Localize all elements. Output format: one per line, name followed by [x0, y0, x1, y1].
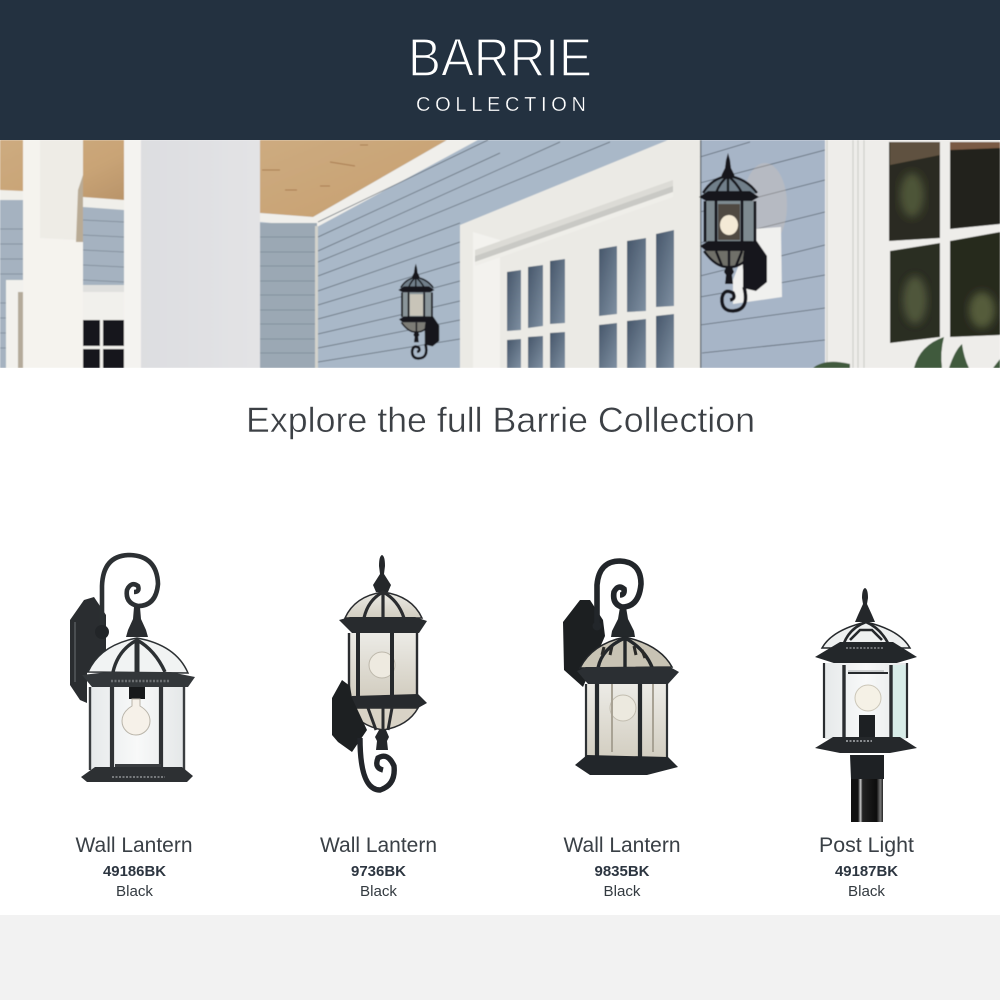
bottom grey band [0, 915, 1000, 1000]
small wall lantern in photo [398, 264, 439, 358]
label 2: 9736BK [351, 864, 406, 880]
label 2 [320, 834, 437, 900]
hero photo: porch with lanterns [0, 140, 1000, 368]
label 4: 49187BK [835, 864, 898, 880]
product 1: wall lantern 49186BK [70, 555, 195, 900]
label 3 [564, 834, 680, 900]
label 1: 49186BK [103, 864, 166, 880]
label 1 [76, 834, 192, 900]
lantern 4 illustration [815, 588, 917, 822]
large wall lantern in photo [699, 153, 767, 311]
white column [124, 140, 260, 368]
label 2: Wall Lantern [320, 834, 437, 857]
back wall [260, 223, 318, 368]
lantern 2 illustration [332, 555, 427, 790]
door window panes [507, 230, 674, 368]
right window frame [825, 140, 1000, 368]
wood ceiling [260, 140, 447, 217]
right wall siding [700, 140, 825, 368]
label 3: 9835BK [594, 864, 650, 880]
ferns [813, 337, 1000, 368]
subtitle: COLLECTION [416, 94, 586, 116]
label 3: Black [604, 883, 641, 900]
label 3: Wall Lantern [564, 834, 680, 857]
left far wall and ceiling [0, 140, 124, 368]
ceiling trim [260, 140, 478, 227]
label 1: Wall Lantern [76, 834, 192, 857]
white beam and bracket [23, 140, 83, 368]
header band [0, 0, 1000, 140]
door frame [460, 140, 700, 368]
label 4 [819, 834, 914, 900]
label 2: Black [360, 883, 397, 900]
product 3: wall lantern 9835BK [563, 561, 680, 900]
section heading: Explore the full Barrie Collection [246, 401, 755, 440]
side wall siding [318, 140, 610, 363]
label 4: Black [848, 883, 885, 900]
lantern 1 illustration [70, 555, 195, 782]
product 4: post light 49187BK [815, 588, 917, 900]
lantern backplate [733, 227, 782, 304]
product 2: wall lantern 9736BK [320, 555, 437, 900]
title: BARRIE [408, 28, 592, 88]
bulb [122, 687, 150, 735]
label 1: Black [116, 883, 153, 900]
lantern 3 illustration [563, 561, 679, 775]
label 4: Post Light [819, 834, 914, 857]
